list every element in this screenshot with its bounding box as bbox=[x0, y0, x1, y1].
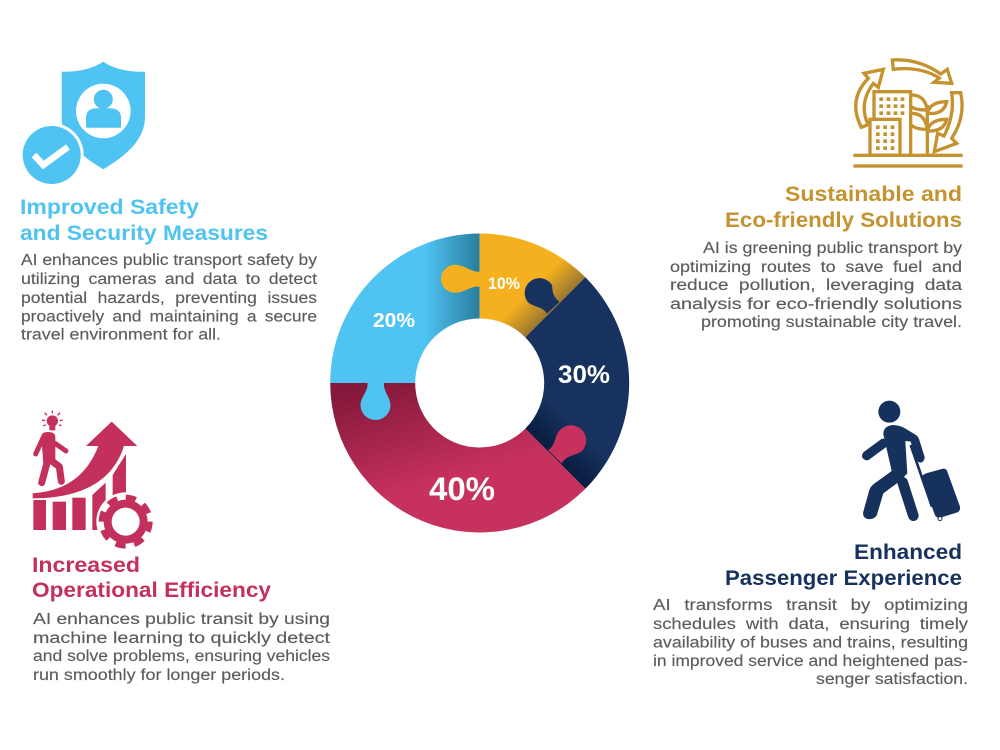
heading: sustainable: Eco-friendly Solutions bbox=[725, 209, 962, 232]
donut puzzle chart bbox=[330, 234, 629, 532]
text: sustainable description bbox=[670, 240, 963, 331]
text: safety description: travel environment for all. bbox=[21, 326, 221, 344]
text: sustainable description: reduce pollution, leveraging data bbox=[670, 277, 963, 294]
icon: city buildings and plant in recycling arrows bbox=[853, 60, 963, 168]
icon: growth arrow, person with idea and gear bbox=[33, 411, 155, 551]
text: passenger description: availability of buses and trains, resulting bbox=[653, 634, 968, 652]
text: efficiency description bbox=[33, 611, 331, 684]
text: passenger description: in improved service and heightened pas- bbox=[653, 653, 968, 670]
text: sustainable description: optimizing routes to save fuel and bbox=[670, 259, 962, 276]
text: sustainable description: AI is greening public transport by bbox=[703, 240, 962, 257]
icon: traveler with suitcase bbox=[863, 401, 960, 521]
puzzle knob: crimson bbox=[548, 425, 586, 464]
text: safety description: potential hazards, preventing issues bbox=[21, 290, 317, 307]
text: sustainable description: analysis for eco-friendly solutions bbox=[670, 296, 962, 313]
puzzle knob: gold bbox=[441, 265, 480, 293]
puzzle knob: blue bbox=[360, 382, 390, 420]
heading: safety: Improved Safety bbox=[20, 196, 199, 219]
text: safety description bbox=[21, 252, 318, 344]
icon: shield with person and check badge bbox=[20, 62, 145, 187]
heading: efficiency: Increased bbox=[32, 554, 140, 577]
label: 40%: 40% bbox=[429, 471, 495, 507]
text: passenger description: senger satisfaction. bbox=[816, 671, 968, 688]
heading: sustainable bbox=[725, 183, 962, 232]
text: sustainable description: promoting sustainable city travel. bbox=[701, 314, 962, 331]
text: efficiency description: run smoothly for longer periods. bbox=[33, 667, 285, 684]
heading: efficiency bbox=[32, 554, 271, 602]
heading: safety: and Security Measures bbox=[20, 222, 268, 245]
text: safety description: proactively and maintaining a secure bbox=[21, 308, 317, 326]
label: 10%: 10% bbox=[488, 274, 520, 293]
heading: efficiency: Operational Efficiency bbox=[32, 579, 271, 602]
segment: 30% navy bbox=[525, 277, 629, 489]
text: safety description: AI enhances public transport safety by bbox=[21, 252, 317, 269]
text: efficiency description: AI enhances public transit by using bbox=[33, 611, 330, 628]
heading: passenger experience bbox=[725, 541, 962, 590]
text: efficiency description: machine learning to quickly detect bbox=[33, 630, 331, 647]
text: passenger description: schedules with data, ensuring timely bbox=[653, 616, 968, 633]
heading: passenger experience: Passenger Experience bbox=[725, 567, 962, 590]
heading: sustainable: Sustainable and bbox=[785, 183, 962, 206]
label: 30%: 30% bbox=[558, 361, 610, 389]
segment: 10% gold bbox=[480, 234, 585, 337]
segment: 20% blue bbox=[330, 234, 480, 383]
text: safety description: utilizing cameras and data to detect bbox=[21, 271, 318, 288]
heading: safety bbox=[20, 196, 268, 245]
text: passenger description bbox=[653, 597, 968, 688]
text: passenger description: AI transforms transit by optimizing bbox=[653, 597, 968, 614]
label: 20%: 20% bbox=[373, 310, 415, 332]
text: efficiency description: and solve problems, ensuring vehicles bbox=[33, 648, 330, 665]
segment: 40% crimson bbox=[330, 383, 585, 532]
heading: passenger experience: Enhanced bbox=[854, 541, 962, 564]
puzzle knob: navy bbox=[525, 278, 560, 314]
